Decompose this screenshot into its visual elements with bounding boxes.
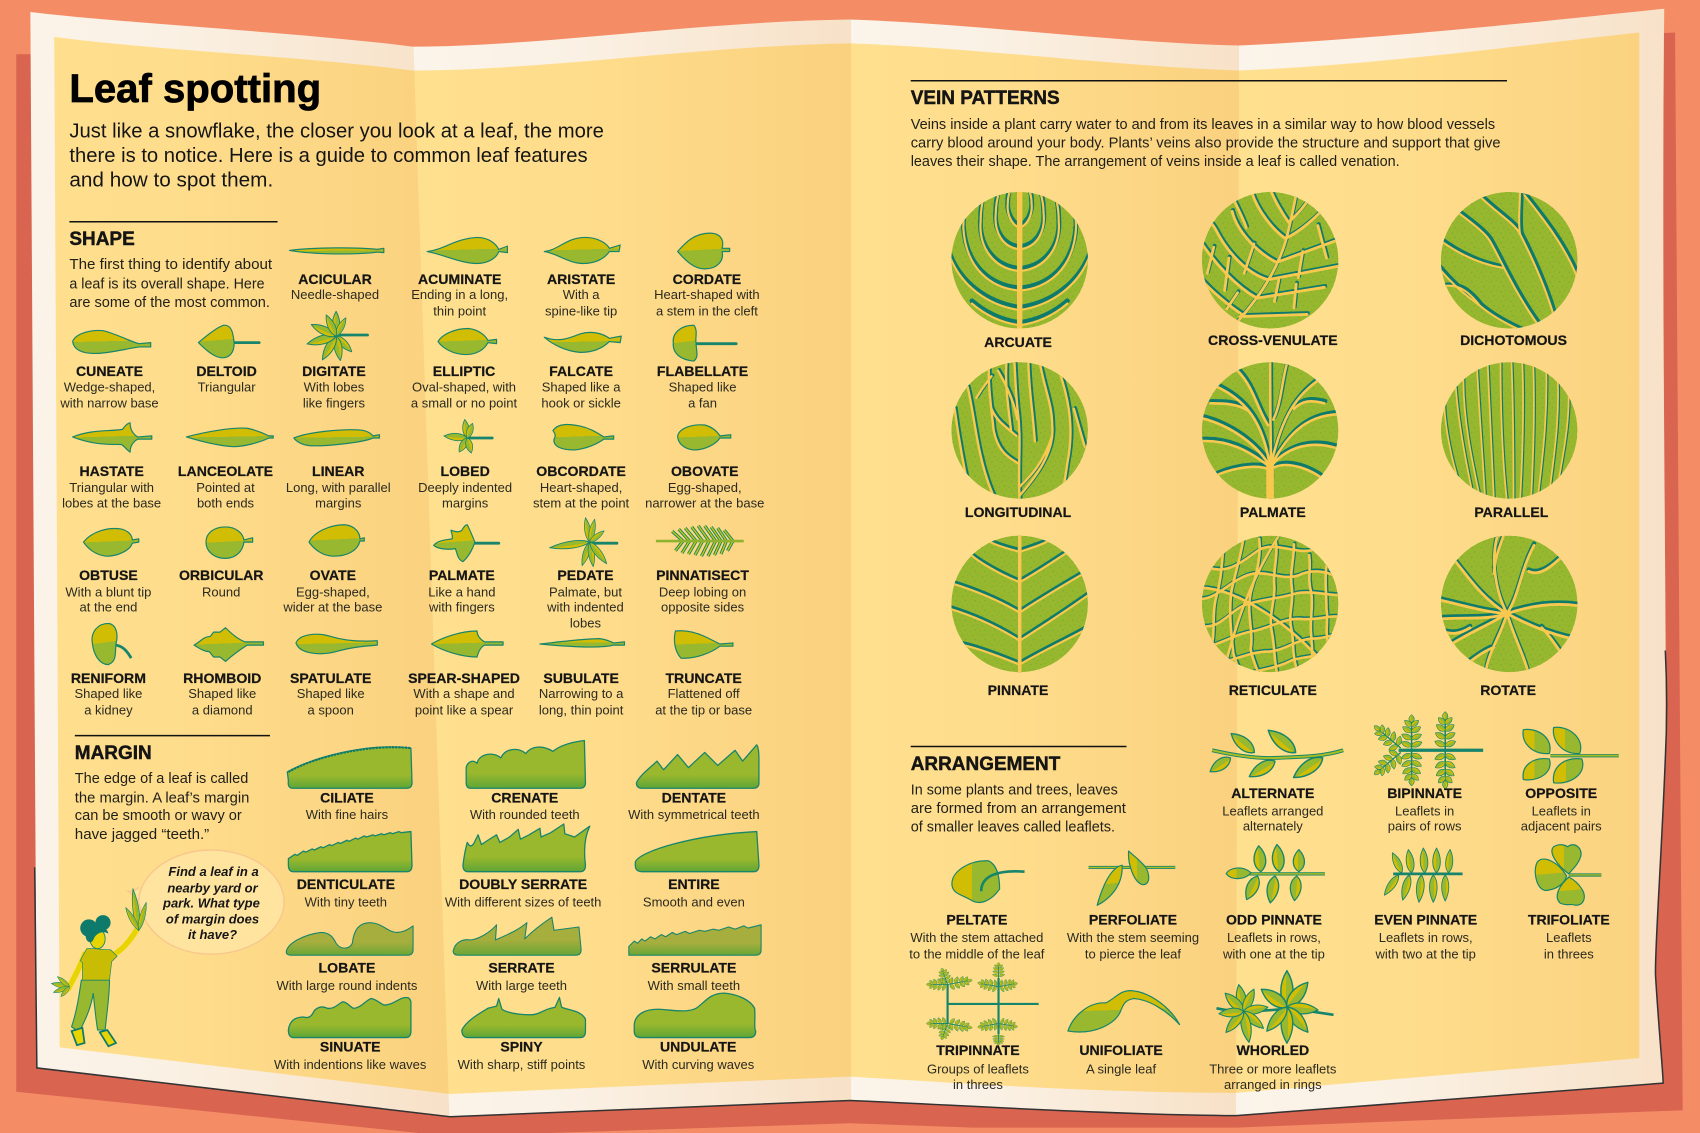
text: vein intro <box>911 117 1501 170</box>
leaf: spear-shaped: With a shape and <box>413 686 515 701</box>
leaf: reniform: RENIFORM <box>71 670 146 686</box>
leaf: cuneate: CUNEATE <box>76 363 143 379</box>
margin: spiny: With sharp, stiff points <box>458 1057 586 1072</box>
vein: pinnate <box>948 530 1091 698</box>
vein: longitudinal <box>951 358 1088 520</box>
arrangement: even pinnate: with two at the tip <box>1374 946 1476 961</box>
vein: longitudinal: LONGITUDINAL <box>965 504 1072 520</box>
arrangement: unifoliate: UNIFOLIATE <box>1079 1042 1163 1058</box>
leaf: pedate: Palmate, but <box>549 584 622 599</box>
vein: palmate: PALMATE <box>1240 504 1306 520</box>
leaf: pedate: with indented <box>546 599 624 614</box>
leaf: aristate <box>544 237 620 319</box>
heading: arrangement: ARRANGEMENT <box>911 754 1061 775</box>
bouquet <box>124 889 149 932</box>
leaf: pinnatisect: PINNATISECT <box>656 567 749 583</box>
intro text: Just like a snowflake, the closer you look at a leaf, the more <box>69 120 604 143</box>
margin: lobate: With large round indents <box>276 978 418 993</box>
arrangement: bipinnate <box>1368 712 1483 833</box>
sandals <box>72 1028 85 1045</box>
vein: parallel: PARALLEL <box>1474 504 1549 520</box>
margin: dentate <box>628 745 760 822</box>
small leaves <box>51 975 71 998</box>
shirt <box>80 948 117 980</box>
vein: cross-venulate: CROSS-VENULATE <box>1208 332 1338 348</box>
arrangement: even pinnate <box>1374 848 1477 961</box>
leaf: cordate <box>654 233 760 319</box>
leaf: rhomboid: RHOMBOID <box>183 670 261 686</box>
leaf: spatulate: a spoon <box>308 702 354 717</box>
leaf: flabellate <box>657 325 748 411</box>
leaf: digitate: DIGITATE <box>302 363 366 379</box>
arrangement: peltate <box>909 861 1045 961</box>
right arm <box>108 928 138 956</box>
vein: cross-venulate <box>1199 187 1343 348</box>
arrangement: whorled <box>1209 971 1337 1092</box>
vein: arcuate <box>948 186 1091 350</box>
leaf: orbicular <box>179 527 263 599</box>
leaf: flabellate: a fan <box>688 396 717 411</box>
arrangement: tripinnate <box>926 962 1039 1092</box>
text: vein intro: leaves their shape. The arrangement of veins inside a leaf is called venation. <box>911 154 1400 170</box>
vein: arcuate: ARCUATE <box>984 334 1052 350</box>
leaf: deltoid: DELTOID <box>196 363 257 379</box>
illustration: girl holding leaves <box>51 889 149 1046</box>
leaf: elliptic <box>411 329 518 411</box>
leaf: deltoid: Triangular <box>198 379 256 394</box>
arrangement: peltate: to the middle of the leaf <box>909 946 1045 961</box>
leaf: spatulate <box>290 634 377 717</box>
margin: spiny <box>458 997 586 1072</box>
leaf: subulate <box>539 639 624 717</box>
leaf: obcordate: OBCORDATE <box>536 463 626 479</box>
arrangement: odd pinnate <box>1222 844 1325 961</box>
leaf: palmate <box>428 525 499 614</box>
margin: entire: ENTIRE <box>668 876 720 892</box>
leaf: flabellate: FLABELLATE <box>657 363 748 379</box>
leaf: obtuse: at the end <box>80 599 137 614</box>
margin: ciliate: CILIATE <box>320 789 374 805</box>
title: Leaf spotting <box>69 67 321 111</box>
leaf: spatulate: Shaped like <box>297 686 365 701</box>
arrangement: bipinnate: pairs of rows <box>1388 818 1462 833</box>
arrangement: odd pinnate: with one at the tip <box>1222 946 1325 961</box>
arrangement: bipinnate: BIPINNATE <box>1387 785 1462 801</box>
arrangement: perfoliate: PERFOLIATE <box>1089 911 1177 927</box>
margin: sinuate <box>274 997 427 1072</box>
margin: undulate: UNDULATE <box>660 1039 736 1055</box>
arrangement: alternate <box>1207 725 1343 833</box>
arrangement: tripinnate: in threes <box>953 1077 1003 1092</box>
leaf: aristate: spine-like tip <box>545 304 617 319</box>
leaf: acicular: ACICULAR <box>298 271 372 287</box>
arrangement: tripinnate: TRIPINNATE <box>936 1042 1020 1058</box>
arrangement: whorled: WHORLED <box>1236 1042 1309 1058</box>
margin: crenate: With rounded teeth <box>470 807 580 822</box>
margin: doubly serrate <box>445 824 601 909</box>
leaf: truncate: TRUNCATE <box>665 670 742 686</box>
leaf: acuminate <box>411 237 508 319</box>
leaf: rhomboid <box>183 628 263 717</box>
callout: speech bubble: park. What type <box>162 895 260 910</box>
margin: denticulate: With tiny teeth <box>305 894 387 909</box>
leaf: hastate: HASTATE <box>79 463 144 479</box>
heading: shape: SHAPE <box>69 229 135 250</box>
arrangement: trifoliate: Leaflets <box>1546 930 1592 945</box>
leaf: pinnatisect: Deep lobing on <box>659 584 746 599</box>
margin: entire <box>635 832 759 909</box>
margin: doubly serrate: DOUBLY SERRATE <box>459 876 587 892</box>
panel: arrangement <box>909 712 1619 1092</box>
heading: margin: MARGIN <box>75 743 152 764</box>
leaf: aristate: With a <box>563 287 600 302</box>
leaf: reniform: a kidney <box>84 702 133 717</box>
text: shape intro: a leaf is its overall shape. Here <box>69 276 265 292</box>
leaf: subulate: SUBULATE <box>543 670 619 686</box>
leaf: cuneate <box>59 330 159 411</box>
leaf: digitate: like fingers <box>303 396 365 411</box>
leaf: rhomboid: a diamond <box>192 702 253 717</box>
leaf: truncate: at the tip or base <box>655 702 752 717</box>
leaf: digitate <box>302 311 368 411</box>
leaf: lobed: Deeply indented <box>418 480 512 495</box>
leaf: falcate: Shaped like a <box>542 379 621 394</box>
margin: serrulate: SERRULATE <box>651 960 736 976</box>
margin: doubly serrate: With different sizes of teeth <box>445 894 601 909</box>
vein: reticulate: RETICULATE <box>1229 682 1317 698</box>
arrangement: trifoliate <box>1528 845 1610 961</box>
leaf: obcordate: stem at the point <box>533 495 630 510</box>
leaf: acicular <box>289 248 384 302</box>
margin: serrate: SERRATE <box>488 960 555 976</box>
leaf: linear: LINEAR <box>312 463 364 479</box>
leaf: palmate: with fingers <box>428 599 495 614</box>
leaf: linear: margins <box>315 495 362 510</box>
leaf: spear-shaped <box>408 631 520 717</box>
margin: dentate: With symmetrical teeth <box>628 807 760 822</box>
text: arrangement intro: are formed from an arrangement <box>911 801 1126 817</box>
panel: vein patterns <box>911 81 1581 698</box>
leaf: lanceolate <box>178 428 273 510</box>
arrangement: whorled: Three or more leaflets <box>1209 1061 1337 1076</box>
arrangement: odd pinnate: Leaflets in rows, <box>1227 930 1321 945</box>
leaf: acuminate: thin point <box>433 304 486 319</box>
margin: spiny: SPINY <box>500 1039 543 1055</box>
leaf: spear-shaped: point like a spear <box>415 702 514 717</box>
leaf: falcate <box>541 332 621 411</box>
intro text: there is to notice. Here is a guide to common leaf features <box>69 144 588 167</box>
leaf: digitate: With lobes <box>304 379 365 394</box>
leaf: lanceolate: both ends <box>197 495 255 510</box>
margin: sinuate: SINUATE <box>320 1039 381 1055</box>
leaf: pedate: PEDATE <box>557 567 613 583</box>
leaf: reniform <box>71 623 146 717</box>
margin: denticulate: DENTICULATE <box>297 876 395 892</box>
margin: crenate <box>466 741 585 822</box>
leaf: elliptic: ELLIPTIC <box>433 363 495 379</box>
leaf: cuneate: with narrow base <box>59 396 159 411</box>
leaf: elliptic: a small or no point <box>411 396 518 411</box>
intro text: and how to spot them. <box>69 168 273 191</box>
text: vein intro: carry blood around your body. Plants’ veins also provide the structure and support that give <box>911 135 1501 151</box>
arrangement: trifoliate: in threes <box>1544 946 1594 961</box>
callout: speech bubble: nearby yard or <box>167 880 259 895</box>
leaf: orbicular: Round <box>202 584 240 599</box>
arrangement: unifoliate: A single leaf <box>1086 1061 1156 1076</box>
vein: parallel <box>1441 359 1577 520</box>
arrangement: alternate: ALTERNATE <box>1231 785 1314 801</box>
leaf: spatulate: SPATULATE <box>290 670 371 686</box>
margin: undulate <box>634 993 756 1072</box>
leaf: ovate: Egg-shaped, <box>296 584 370 599</box>
margin: ciliate <box>287 747 412 822</box>
leaf: subulate: long, thin point <box>539 702 624 717</box>
leaf: pedate: lobes <box>570 616 601 631</box>
margin: dentate: DENTATE <box>662 789 726 805</box>
margin: serrate: With large teeth <box>476 978 567 993</box>
head <box>90 929 105 949</box>
leaf: subulate: Narrowing to a <box>539 686 624 701</box>
vein: dichotomous <box>1438 187 1578 348</box>
text: margin intro: can be smooth or wavy or <box>75 808 242 824</box>
leaf: hastate: lobes at the base <box>62 495 161 510</box>
leaf: spear-shaped: SPEAR-SHAPED <box>408 670 520 686</box>
leaf: cuneate: Wedge-shaped, <box>64 379 155 394</box>
leaf: obovate: Egg-shaped, <box>668 480 742 495</box>
leaf: obovate: narrower at the base <box>645 495 764 510</box>
leaf: obtuse: With a blunt tip <box>65 584 151 599</box>
margin: undulate: With curving waves <box>642 1057 755 1072</box>
leaf: cordate: CORDATE <box>673 271 741 287</box>
leaf: aristate: ARISTATE <box>547 271 615 287</box>
leaf: falcate: FALCATE <box>549 363 613 379</box>
leaf: orbicular: ORBICULAR <box>179 567 263 583</box>
leaf: ovate: wider at the base <box>282 599 382 614</box>
text: arrangement intro <box>911 783 1126 836</box>
margin: ciliate: With fine hairs <box>306 807 389 822</box>
legs <box>72 980 110 1032</box>
vein: rotate <box>1438 530 1581 698</box>
text: vein intro: Veins inside a plant carry water to and from its leaves in a similar way to how blood vessels <box>911 117 1495 133</box>
margin: lobate <box>276 923 418 993</box>
leaf: acicular: Needle-shaped <box>291 287 379 302</box>
leaf: pinnatisect <box>656 526 749 614</box>
margin: serrate <box>453 917 581 993</box>
leaf: acuminate: ACUMINATE <box>418 271 501 287</box>
leaf: ovate <box>282 525 382 614</box>
arrangement: whorled: arranged in rings <box>1224 1077 1322 1092</box>
leaf: pinnatisect: opposite sides <box>661 599 745 614</box>
arrangement: alternate: Leaflets arranged <box>1222 803 1323 818</box>
leaf: elliptic: Oval-shaped, with <box>412 379 516 394</box>
leaf: palmate: Like a hand <box>428 584 495 599</box>
leaf: reniform: Shaped like <box>74 686 142 701</box>
vein: palmate <box>1199 357 1343 520</box>
left arm <box>68 954 85 989</box>
leaf: truncate: Flattened off <box>668 686 740 701</box>
arrangement: odd pinnate: ODD PINNATE <box>1226 911 1322 927</box>
vein: reticulate <box>1199 531 1343 698</box>
vein: dichotomous: DICHOTOMOUS <box>1460 332 1567 348</box>
leaf: lobed: LOBED <box>440 463 490 479</box>
leaf: obcordate: Heart-shaped, <box>540 480 622 495</box>
arrangement: perfoliate: to pierce the leaf <box>1085 946 1181 961</box>
callout: speech bubble: Find a leaf in a <box>168 864 259 879</box>
leaf: rhomboid: Shaped like <box>188 686 256 701</box>
text: margin intro <box>75 771 249 843</box>
leaf: hastate <box>62 423 161 510</box>
leaf: cordate: a stem in the cleft <box>656 304 758 319</box>
margin: denticulate <box>288 832 412 909</box>
leaf: obovate <box>645 425 764 510</box>
leaf: pedate <box>546 517 624 631</box>
arrangement: alternate: alternately <box>1243 818 1303 833</box>
arrangement: unifoliate <box>1068 991 1180 1076</box>
text: margin intro: The edge of a leaf is called <box>75 771 248 787</box>
leaf: cordate: Heart-shaped with <box>654 287 760 302</box>
arrangement: trifoliate: TRIFOLIATE <box>1528 911 1610 927</box>
leaf: lanceolate: LANCEOLATE <box>178 463 273 479</box>
callout: speech bubble: it have? <box>188 927 237 942</box>
arrangement: tripinnate: Groups of leaflets <box>927 1061 1029 1076</box>
leaf: obovate: OBOVATE <box>671 463 738 479</box>
leaf: deltoid <box>196 325 259 394</box>
arrangement: opposite <box>1521 727 1619 833</box>
text: arrangement intro: of smaller leaves called leaflets. <box>911 820 1115 836</box>
text: shape intro: are some of the most common. <box>69 295 270 311</box>
leaf: lanceolate: Pointed at <box>196 480 255 495</box>
panel: margin <box>75 736 761 1072</box>
panel: shape <box>59 222 764 717</box>
arrangement: perfoliate: With the stem seeming <box>1067 930 1199 945</box>
leaf: lobed: margins <box>442 495 489 510</box>
hair <box>86 926 108 942</box>
heading: vein patterns: VEIN PATTERNS <box>911 88 1060 109</box>
arrangement: bipinnate: Leaflets in <box>1395 803 1454 818</box>
text: shape intro: The first thing to identify about <box>69 257 272 273</box>
arrangement: peltate: PELTATE <box>946 911 1007 927</box>
intro text <box>69 120 604 191</box>
leaf: obtuse: OBTUSE <box>79 567 138 583</box>
callout: speech bubble: of margin does <box>166 912 259 927</box>
text: arrangement intro: In some plants and trees, leaves <box>911 783 1118 799</box>
leaf: lobed <box>418 419 512 510</box>
arrangement: even pinnate: EVEN PINNATE <box>1374 911 1477 927</box>
margin: crenate: CRENATE <box>491 789 558 805</box>
arrangement: peltate: With the stem attached <box>910 930 1043 945</box>
vein: pinnate: PINNATE <box>988 682 1048 698</box>
leaf: ovate: OVATE <box>310 567 356 583</box>
leaf: hastate: Triangular with <box>69 480 154 495</box>
margin: serrulate: With small teeth <box>648 978 740 993</box>
leaf: falcate: hook or sickle <box>541 396 621 411</box>
margin: lobate: LOBATE <box>319 960 375 976</box>
arrangement: opposite: Leaflets in <box>1532 803 1591 818</box>
arrangement: perfoliate <box>1067 851 1199 961</box>
arrangement: opposite: OPPOSITE <box>1525 785 1597 801</box>
text: margin intro: have jagged “teeth.” <box>75 827 209 843</box>
leaf: obtuse <box>65 529 151 614</box>
leaf: obcordate <box>533 425 630 510</box>
margin: sinuate: With indentions like waves <box>274 1057 427 1072</box>
arrangement: even pinnate: Leaflets in rows, <box>1379 930 1473 945</box>
text: margin intro: the margin. A leaf’s margin <box>75 790 249 806</box>
text: shape intro <box>69 257 272 311</box>
leaf: palmate: PALMATE <box>429 567 495 583</box>
arrangement: opposite: adjacent pairs <box>1521 818 1602 833</box>
callout: speech bubble <box>128 850 284 954</box>
leaf: linear <box>286 430 391 510</box>
leaf: truncate <box>655 631 752 717</box>
margin: entire: Smooth and even <box>643 894 745 909</box>
leaf: flabellate: Shaped like <box>669 379 737 394</box>
leaf: linear: Long, with parallel <box>286 480 391 495</box>
leaf: acuminate: Ending in a long, <box>411 287 508 302</box>
vein: rotate: ROTATE <box>1480 682 1536 698</box>
margin: serrulate <box>629 925 761 993</box>
